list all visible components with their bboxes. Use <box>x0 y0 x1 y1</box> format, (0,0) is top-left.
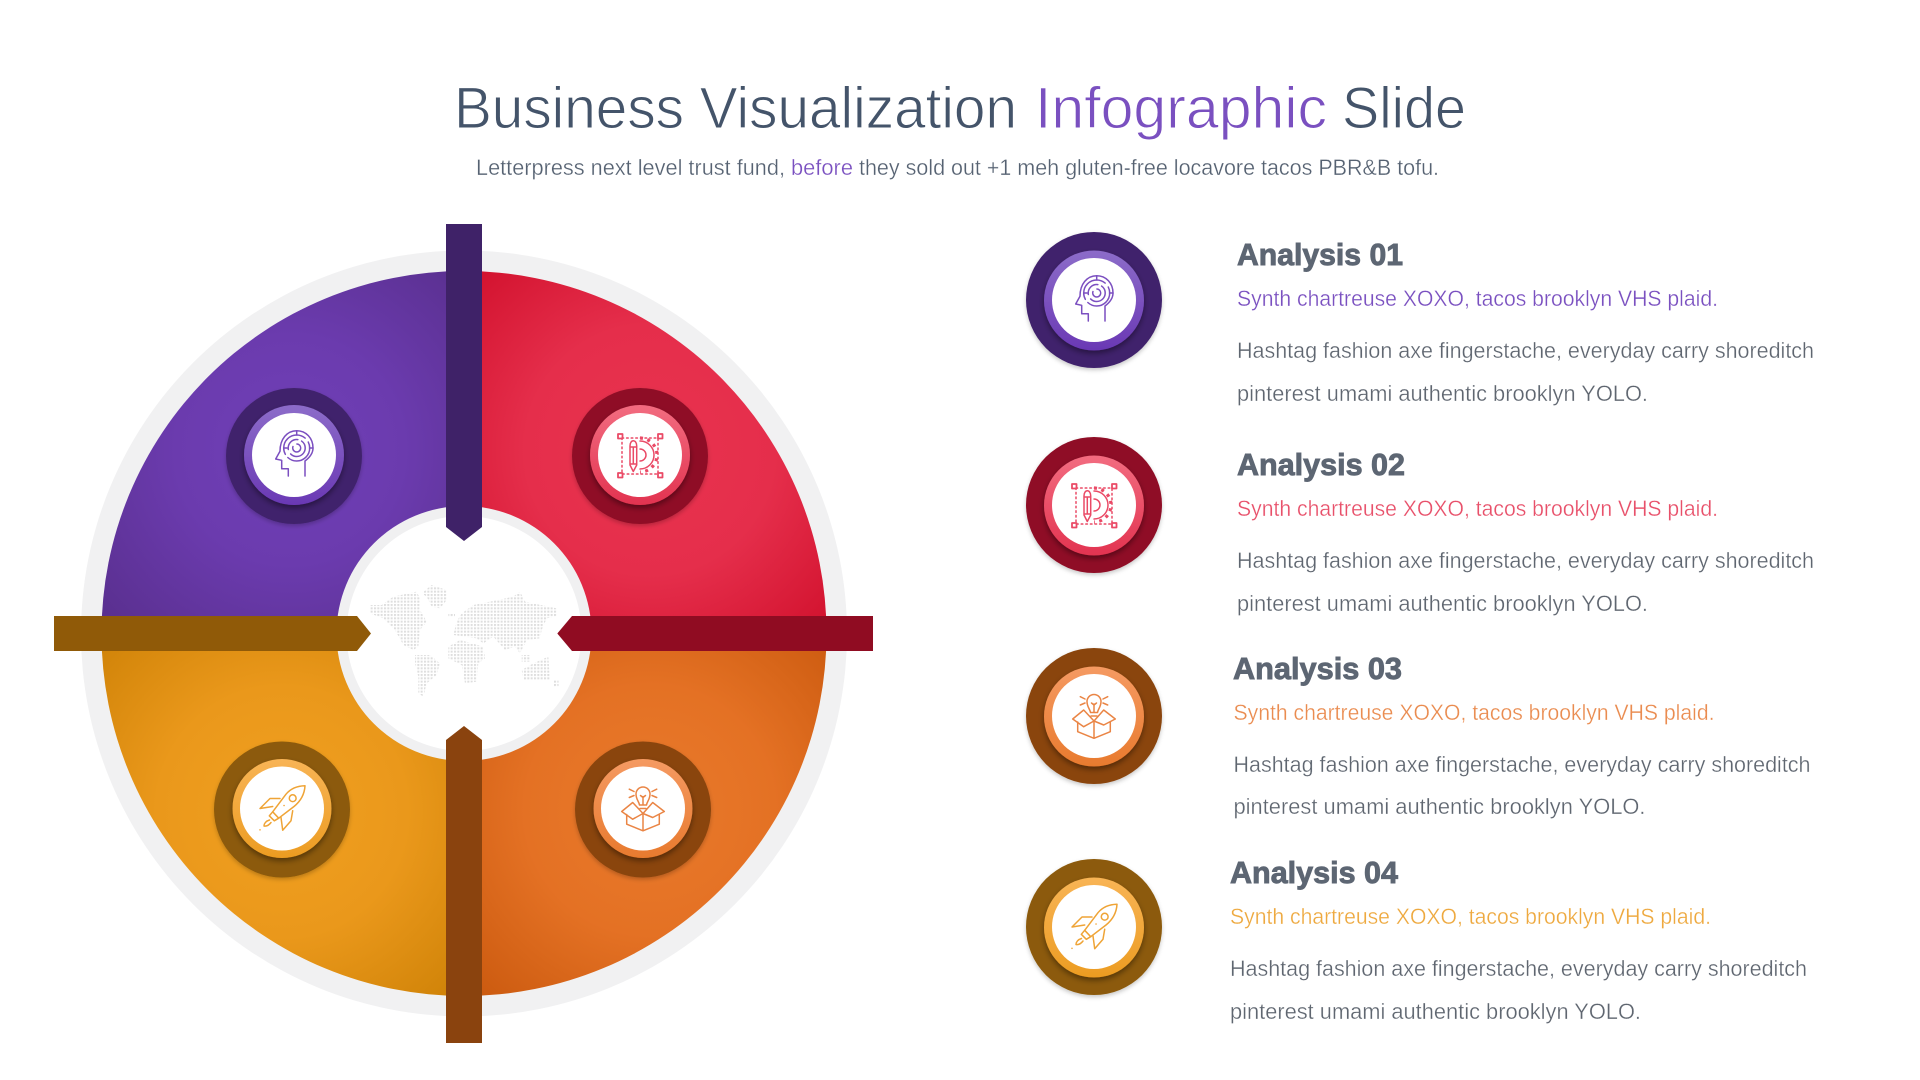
arrow bar: top <box>446 224 482 541</box>
arrow bar: bottom <box>446 726 482 1043</box>
icon: rocket <box>1026 859 1162 995</box>
wheel diagram <box>54 224 873 1043</box>
title <box>454 76 1466 141</box>
title: Slide <box>1342 76 1466 141</box>
tagline: Synth chartreuse XOXO, tacos brooklyn VHS plaid. <box>1237 496 1718 521</box>
arrow bar: right <box>557 616 873 651</box>
wheel outer ring <box>81 250 847 1016</box>
medallion: gear icon <box>572 388 708 524</box>
medallion: head icon <box>226 388 362 524</box>
item: analysis 02 <box>1026 437 1814 616</box>
body text <box>1230 956 1807 1024</box>
segment: red <box>464 271 826 634</box>
body text: Hashtag fashion axe fingerstache, everyday carry shoreditch <box>1230 956 1807 981</box>
heading: Analysis 02 <box>1237 447 1405 482</box>
icon: head <box>1026 232 1162 368</box>
body text: Hashtag fashion axe fingerstache, everyday carry shoreditch <box>1234 752 1810 777</box>
subtitle: before <box>791 155 853 180</box>
tagline: Synth chartreuse XOXO, tacos brooklyn VHS plaid. <box>1234 700 1714 725</box>
dotted world map <box>367 582 563 698</box>
heading: Analysis 04 <box>1230 855 1399 890</box>
tagline: Synth chartreuse XOXO, tacos brooklyn VHS plaid. <box>1237 286 1718 311</box>
item: analysis 01 <box>1026 232 1814 406</box>
body text: pinterest umami authentic brooklyn YOLO. <box>1237 381 1648 406</box>
subtitle: Letterpress next level trust fund, <box>476 155 785 180</box>
icon: gear <box>1026 437 1162 573</box>
medallion: rocket icon <box>214 742 350 878</box>
item: analysis 03 <box>1026 648 1810 819</box>
heading: Analysis 01 <box>1237 237 1403 272</box>
segment: purple <box>102 271 464 634</box>
heading: Analysis 03 <box>1233 651 1402 686</box>
segment: orange <box>464 634 826 996</box>
segment: yellow <box>102 634 464 996</box>
body text: pinterest umami authentic brooklyn YOLO. <box>1237 591 1648 616</box>
subtitle <box>476 155 1439 180</box>
item: analysis 04 <box>1026 855 1807 1024</box>
body text: pinterest umami authentic brooklyn YOLO. <box>1230 999 1641 1024</box>
body text <box>1237 338 1814 406</box>
centre hub <box>336 506 592 761</box>
title: Business Visualization <box>454 76 1017 141</box>
arrow bar: left <box>54 616 371 651</box>
medallion: box icon <box>575 742 711 878</box>
tagline: Synth chartreuse XOXO, tacos brooklyn VHS plaid. <box>1230 904 1711 929</box>
body text <box>1237 548 1814 616</box>
body text: Hashtag fashion axe fingerstache, everyday carry shoreditch <box>1237 338 1814 363</box>
title: Infographic <box>1035 76 1327 141</box>
body text: Hashtag fashion axe fingerstache, everyday carry shoreditch <box>1237 548 1814 573</box>
icon: box <box>1026 648 1162 784</box>
subtitle: they sold out +1 meh gluten-free locavore tacos PBR&B tofu. <box>859 155 1439 180</box>
body text: pinterest umami authentic brooklyn YOLO. <box>1234 794 1646 819</box>
body text <box>1234 752 1810 819</box>
